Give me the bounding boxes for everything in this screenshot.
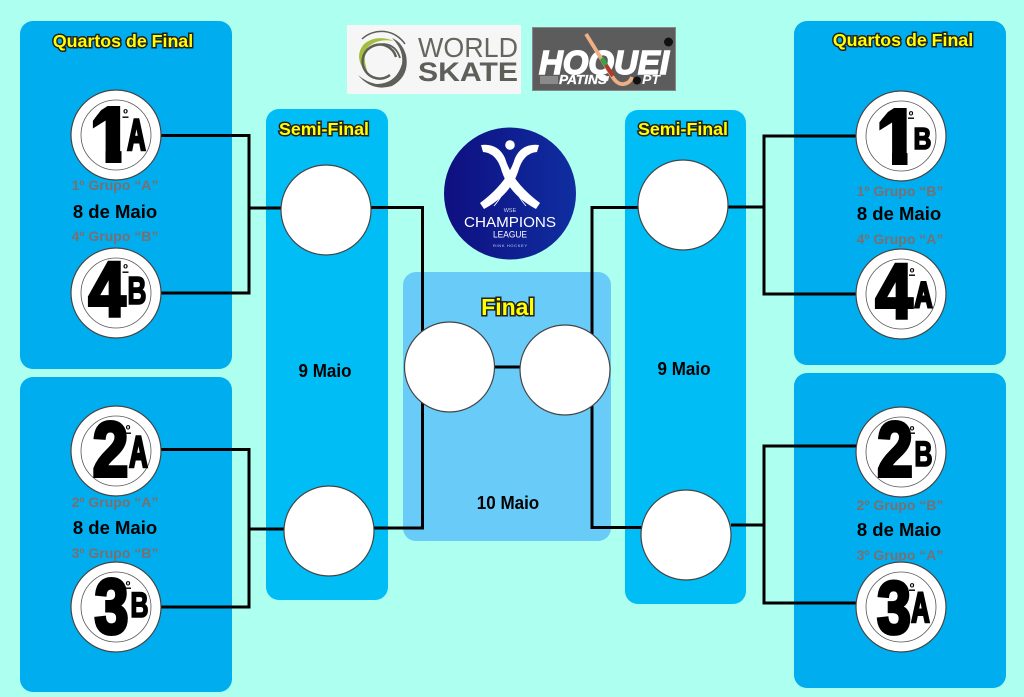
logo: WSE Champions League: RINK HOCKEY [493,243,527,248]
logo: WSE Champions League: LEAGUE [493,230,527,240]
final slot right [520,325,610,415]
seed 2B: º [910,423,915,438]
seed 4A: º [910,265,915,280]
seed 2B: B [914,435,933,474]
heading: semi-final right: Semi-Final [638,119,728,139]
seed 2A: 2 [93,406,128,492]
seed 4B: B [127,270,147,313]
seed 1A [71,90,161,180]
seed 4A [856,249,946,339]
seed 4B: 4 [89,247,125,333]
logo: Hoquei Patins PT [532,28,676,90]
logo: WSE Champions League [444,128,576,260]
seed 4B: º [123,261,128,276]
date semi right: 9 Maio [658,358,711,379]
panel: quarter-final bottom right [794,373,1006,688]
seed 2B [856,406,946,497]
seed 1A: A [127,109,146,159]
panel: quarter-final top left [20,21,232,369]
seed 1B [856,91,946,181]
seed 3A: 3 [877,567,911,649]
date final: 10 Maio [477,492,539,513]
date right bottom: 8 de Maio [857,519,941,540]
panel: quarter-final bottom left [20,377,232,692]
seed 3A: º [910,580,915,595]
seed 1B: B [914,121,931,156]
date right top: 8 de Maio [857,203,941,224]
group label 4B: 4º Grupo “B” [72,228,158,244]
logo: World Skate: WORLD [418,32,518,63]
logo: Hoquei Patins PT: HOQUEI [539,44,670,81]
group label 3A: 3º Grupo “A” [857,547,943,563]
panel: semi-final left [266,109,388,600]
semi-final slot right top [638,160,728,250]
seed 2B: 2 [877,406,913,492]
logo: WSE Champions League: WSE [504,208,517,214]
logo: World Skate [347,25,521,94]
seed 4A: A [915,277,932,315]
date semi left: 9 Maio [299,360,352,381]
logo: Hoquei Patins PT: PATINS [559,72,607,87]
seed 3B: º [126,578,131,593]
final slot left [404,322,494,412]
heading: quarter-finals right: Quartos de Final [833,30,973,50]
panel: final [403,272,611,541]
group label 1B: 1º Grupo “B” [857,183,943,199]
panel: quarter-final top right [794,21,1006,365]
group label 3B: 3º Grupo “B” [72,545,158,561]
group label 2B: 2º Grupo “B” [857,497,943,513]
seed 1B: 1 [876,94,919,180]
seed 3A: A [911,586,930,632]
panel: semi-final right [625,110,746,604]
seed 1A: 1 [90,92,132,178]
seed 2A: º [126,422,131,437]
heading: semi-final left: Semi-Final [279,119,369,139]
date left bottom: 8 de Maio [73,517,157,538]
group label 1A: 1º Grupo “A” [72,177,158,193]
seed 3B: 3 [95,563,128,650]
seed 2A [71,406,161,496]
seed 3B [71,562,161,652]
logo: WSE Champions League: CHAMPIONS [464,214,556,231]
seed 3B: B [130,586,149,625]
logo: Hoquei Patins PT: PT [642,72,661,87]
date left top: 8 de Maio [73,201,157,222]
bracket lines [160,136,857,607]
group label 2A: 2º Grupo “A” [72,494,158,510]
semi-final slot left bottom [284,486,374,576]
logo: World Skate: SKATE [418,57,518,87]
seed 1A: º [123,106,128,121]
group label 4A: 4º Grupo “A” [857,231,943,247]
seed 1B: º [909,108,914,123]
seed 2A: A [129,426,148,476]
heading: quarter-finals left: Quartos de Final [53,31,193,51]
semi-final slot right bottom [641,490,731,580]
heading: final: Final [481,294,535,320]
semi-final slot left top [281,165,371,255]
seed 4B [71,247,161,338]
seed 4A: 4 [876,249,912,335]
seed 3A [856,562,946,652]
